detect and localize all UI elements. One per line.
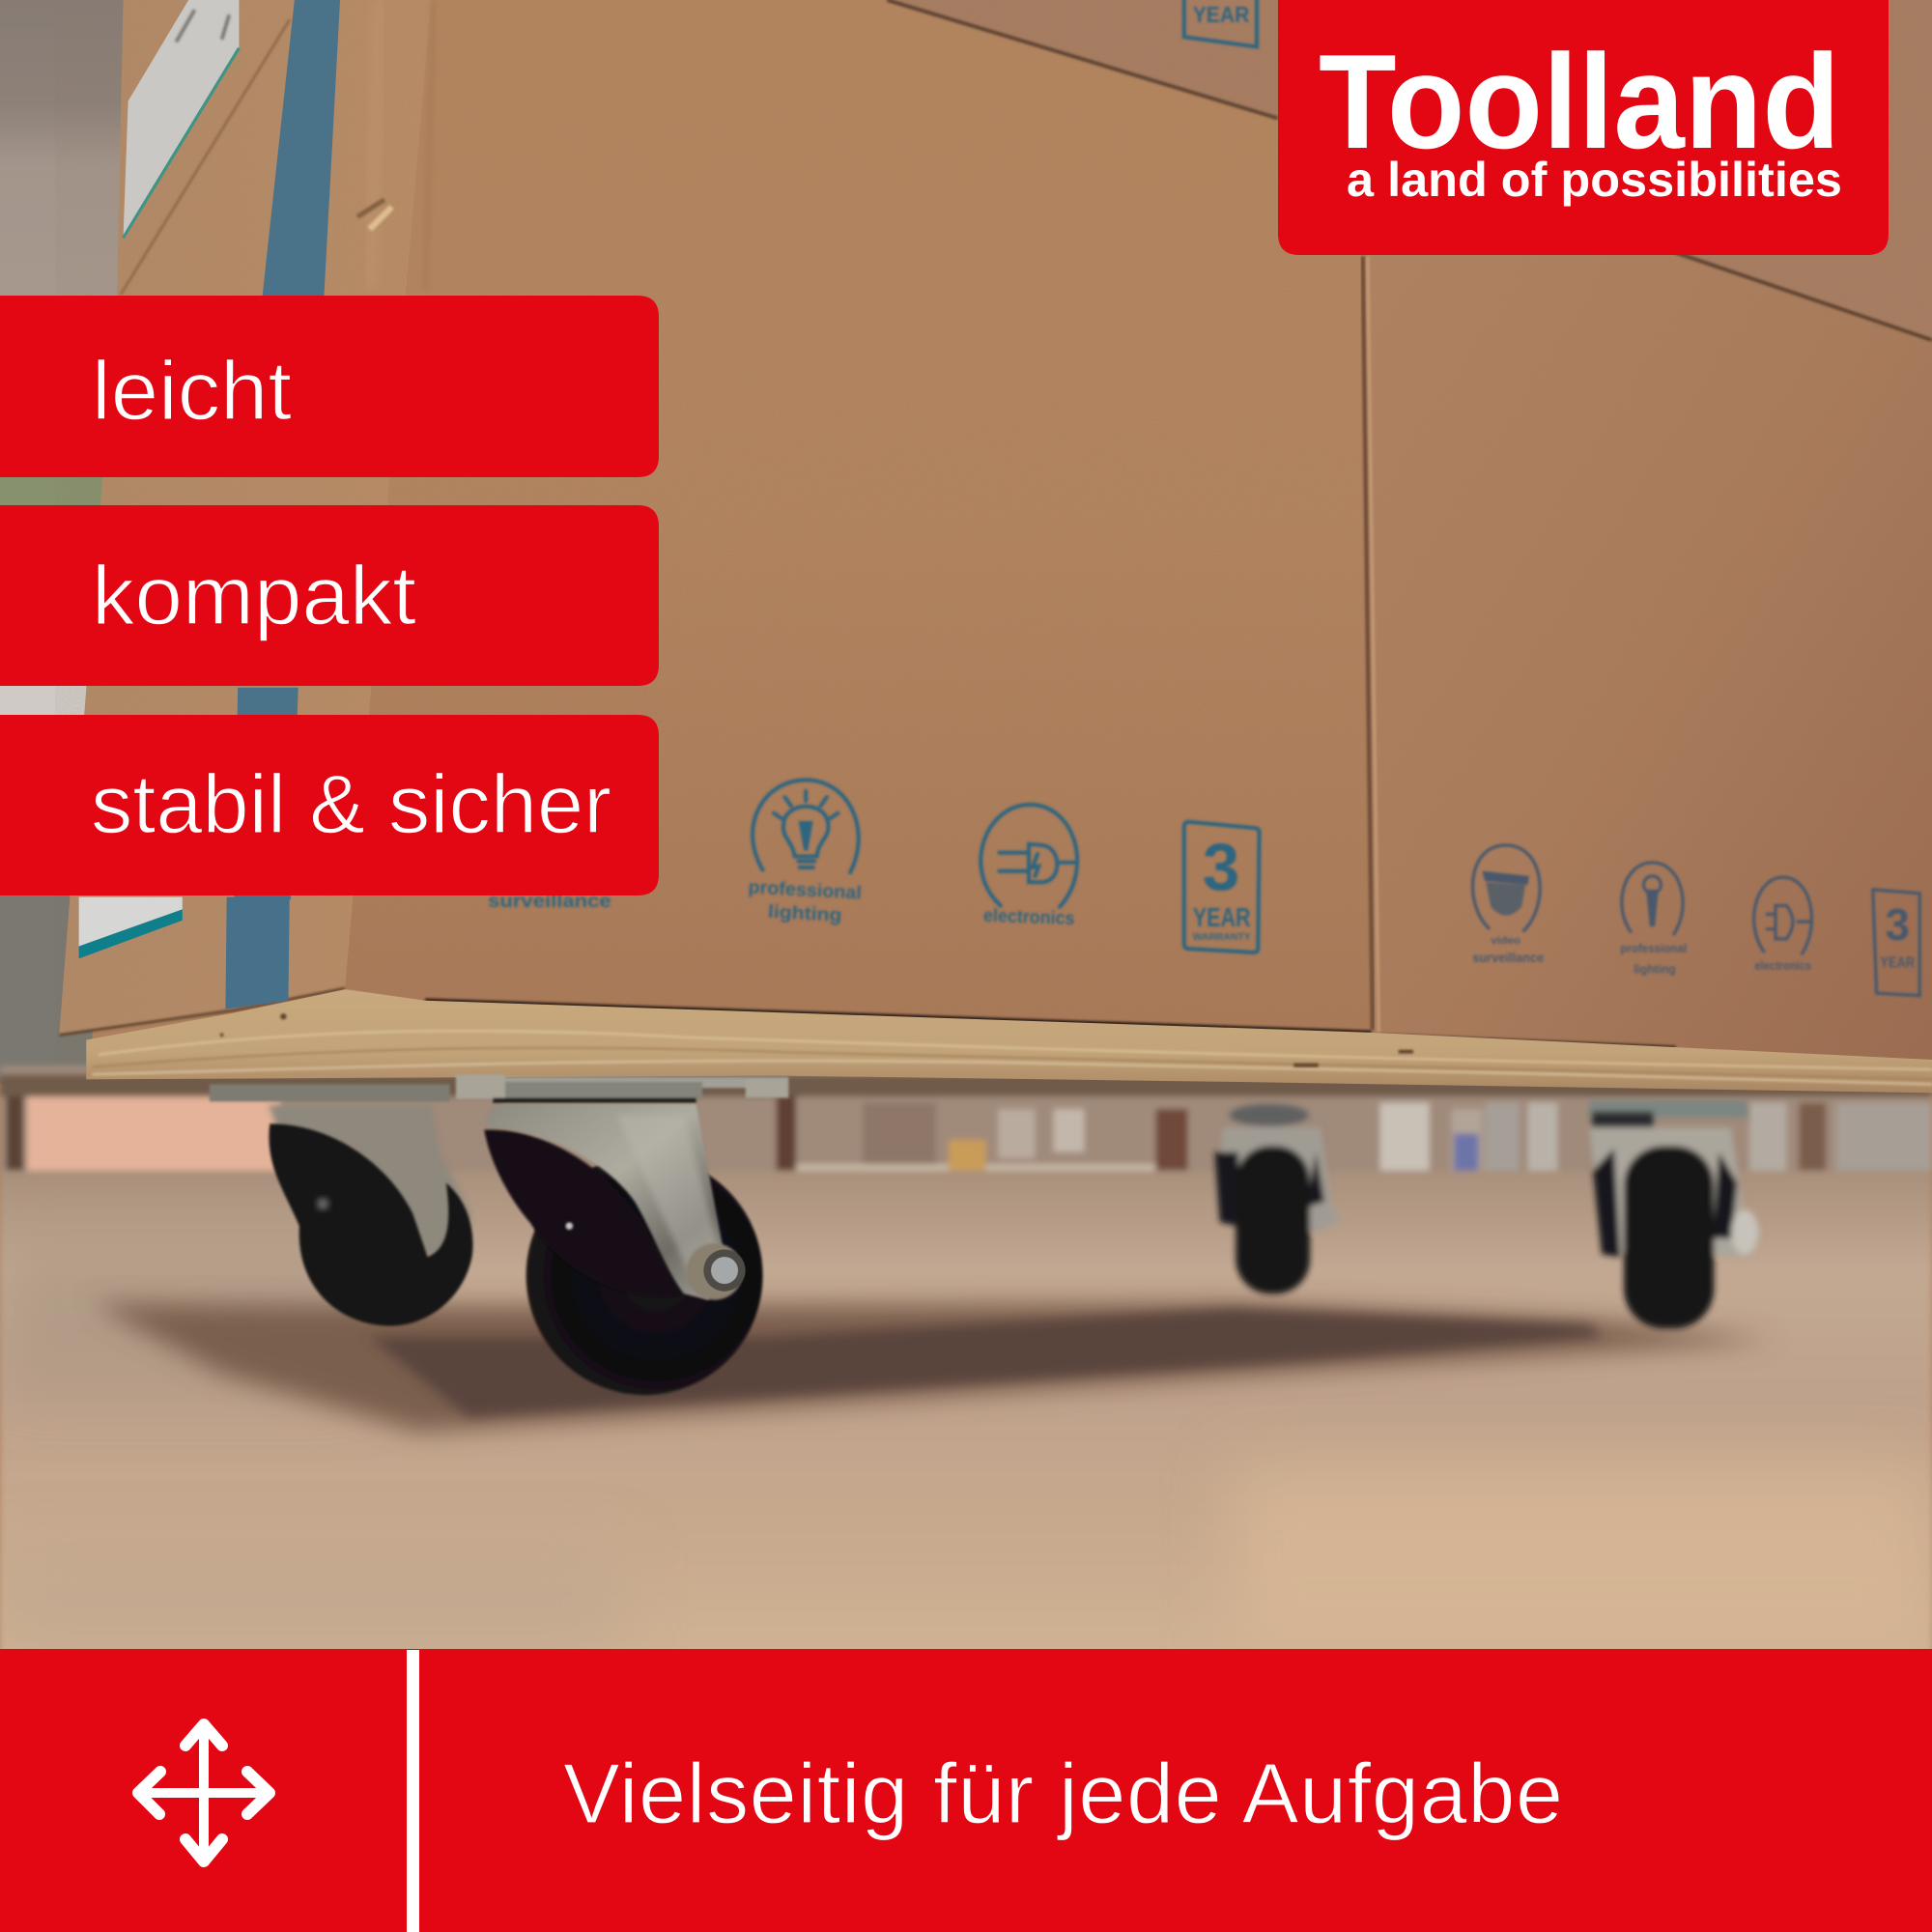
printed icons: [488, 0, 1260, 952]
icon: badge blurred: [1873, 890, 1919, 996]
icon: professional lighting label: professional: [748, 877, 862, 904]
far middle top: [1230, 1104, 1309, 1126]
far right dark mount: [1592, 1112, 1654, 1128]
icon: 3 year warranty: YEAR: [1193, 902, 1251, 932]
white shipping labels: [79, 0, 239, 958]
box seams: [59, 0, 1932, 1047]
right box: [1355, 142, 1932, 1060]
icon: light bulb: [753, 780, 859, 872]
far right caster: [1589, 1100, 1762, 1328]
top box: [863, 0, 1932, 343]
icon: 3 year warranty: [1184, 822, 1260, 952]
plywood platform: [86, 989, 1932, 1093]
icon: camera: surveillance: [1472, 950, 1544, 965]
icon: camera: video: [1491, 935, 1520, 947]
front plate: [456, 1074, 788, 1103]
icon: plug blurred: [1754, 877, 1811, 973]
front axle nut: [686, 1243, 746, 1300]
logo panel: [1278, 0, 1889, 255]
background wall: [0, 0, 135, 370]
main box face: [345, 0, 1372, 1033]
banner text: Vielseitig für jede Aufgabe: [563, 1746, 1563, 1841]
icon: bulb blurred: professional: [1620, 941, 1687, 955]
feature pill: kompakt: kompakt: [92, 550, 416, 642]
dark left background: [0, 887, 93, 1084]
blurred icons on right box: [1472, 845, 1919, 996]
white background strip: [0, 678, 89, 724]
far right wheel: [1624, 1146, 1714, 1328]
icon: bulb blurred: lighting: [1634, 962, 1676, 977]
floor: [0, 1171, 1932, 1663]
icon: camera: [1472, 845, 1544, 965]
front fork dark: [484, 1130, 684, 1296]
icon: 3 year warranty: WARRANTY: [1193, 932, 1251, 943]
background band: [0, 1065, 1932, 1204]
back left plate: [210, 1084, 450, 1101]
feature pill: stabil & sicher: stabil & sicher: [91, 758, 611, 851]
back left caster: [210, 1084, 472, 1325]
icon: badge blurred: YEAR: [1880, 954, 1915, 971]
icon: surveillance label: surveillance: [488, 892, 611, 912]
floor shadow: [93, 1303, 1775, 1432]
icon: 3 year warranty: 3: [1203, 830, 1239, 904]
icon: year badge on top box: YEAR: [1193, 2, 1250, 27]
back left fork and wheel: [269, 1123, 472, 1325]
icon: bulb blurred: [1620, 863, 1687, 977]
far middle fork: [1215, 1152, 1324, 1226]
back left bracket: [269, 1105, 470, 1257]
front bracket shading: [616, 1115, 721, 1275]
icon: plug: [980, 805, 1077, 907]
feature pill: stabil & sicher: [0, 715, 659, 895]
logo wordmark: Toolland: [1319, 27, 1840, 177]
front wheel: [526, 1155, 763, 1395]
far middle wheel: [1236, 1146, 1310, 1293]
floor light patches: [0, 1244, 1932, 1651]
icon: professional lighting label: lighting: [767, 902, 842, 926]
far right bracket: [1589, 1127, 1762, 1257]
front bracket: [487, 1104, 727, 1300]
bottom banner: [0, 1649, 1932, 1932]
icon: plug blurred: electronics: [1754, 958, 1811, 973]
far middle caster: [1215, 1104, 1341, 1293]
feature pill: kompakt: [0, 505, 659, 686]
far right fork: [1593, 1149, 1737, 1257]
left box side: [59, 0, 438, 1035]
icon: badge blurred: 3: [1886, 899, 1910, 950]
far right plate: [1589, 1100, 1747, 1118]
back left nut highlight: [317, 1198, 329, 1210]
far middle bracket: [1220, 1127, 1341, 1233]
green background strip: [0, 469, 104, 518]
icon: electronics label: electronics: [983, 906, 1075, 929]
far right nut: [1731, 1210, 1758, 1254]
blue tape: [225, 0, 340, 1009]
icon: professional lighting label: [748, 877, 862, 926]
logo tagline: a land of possibilities: [1347, 153, 1842, 207]
blurred background and floor: [0, 1065, 1932, 1663]
cardboard grain: [55, 0, 1932, 1060]
feature pill: leicht: leicht: [92, 345, 292, 438]
front rivet highlight: [565, 1222, 573, 1230]
icon: year badge on top box: [1184, 0, 1257, 46]
feature pill: leicht: [0, 296, 659, 477]
front left caster: [456, 1074, 788, 1395]
icon: four-way arrows: [138, 1724, 270, 1861]
